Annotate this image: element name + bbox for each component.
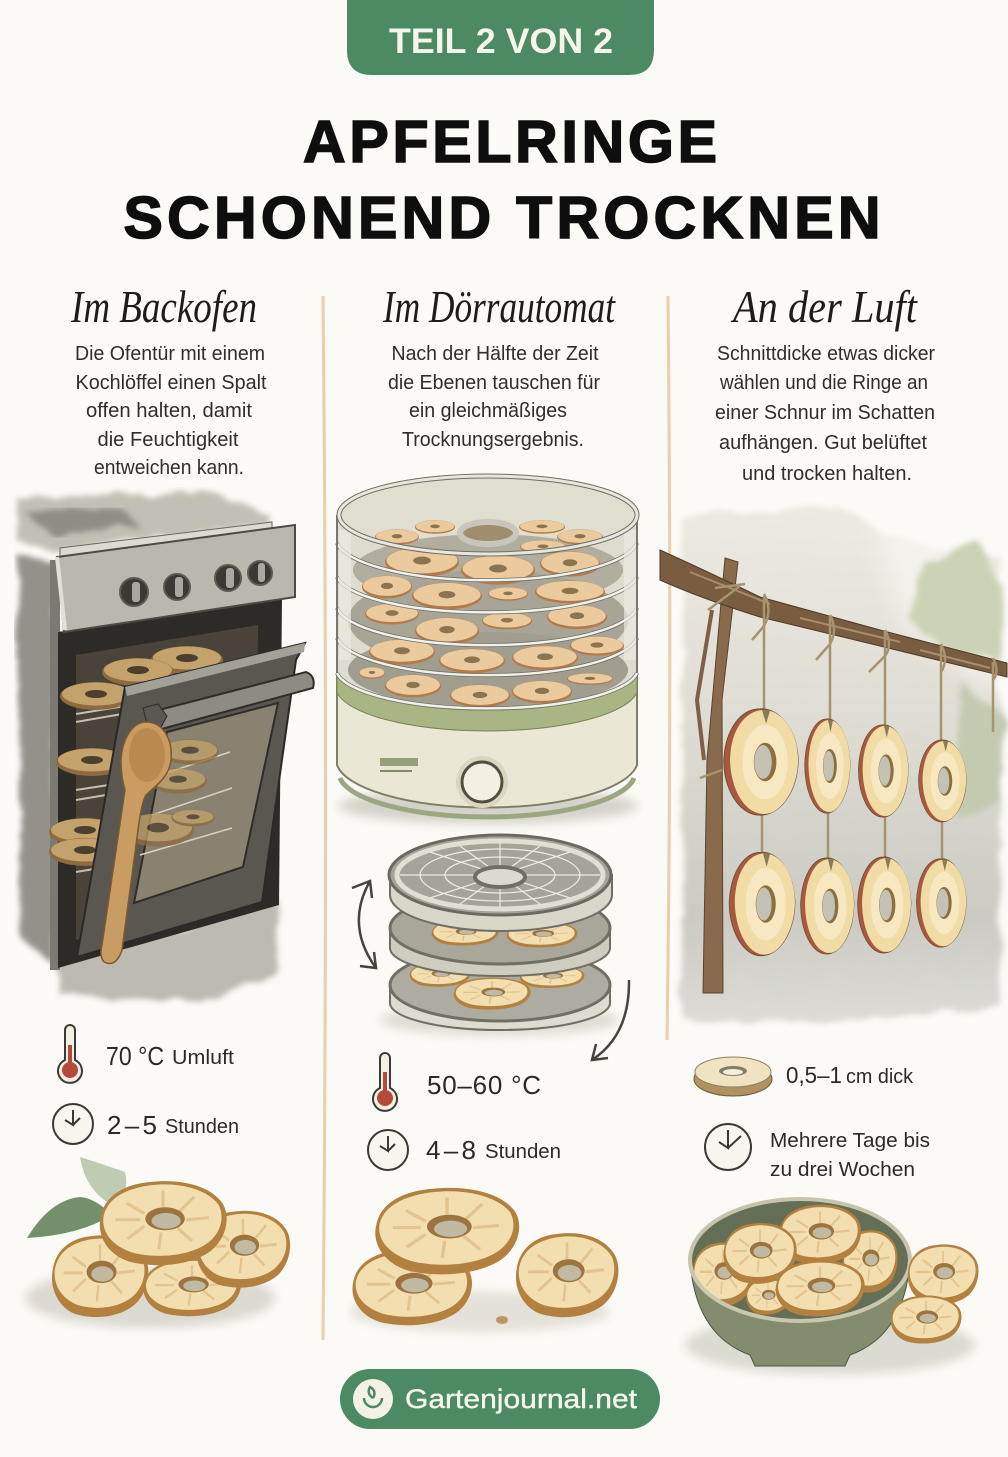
label: 4–8 Stunden — [426, 1135, 561, 1165]
text block: Backofen: die Feuchtigkeit — [98, 429, 239, 451]
label: Mehrere Tage bis zu drei Wochen: Mehrere Tage bis — [770, 1130, 930, 1152]
label: 2–5 Stunden — [107, 1110, 239, 1140]
panel: An der Luft — [660, 281, 1007, 1375]
label: 0,5–1 cm dick: cm dick — [846, 1066, 914, 1088]
label: 2–5 Stunden: Stunden — [165, 1116, 239, 1138]
footer badge: Gartenjournal.net — [340, 1369, 660, 1429]
illustration: food dehydrator — [337, 476, 638, 824]
label: 50–60 °C: 50–60 °C — [427, 1070, 541, 1100]
support post — [703, 558, 738, 993]
label: 70 °C Umluft: Umluft — [172, 1047, 234, 1069]
label: 70 °C Umluft — [106, 1041, 234, 1071]
text block: Dörrautomat: die Ebenen tauschen für — [388, 372, 600, 394]
lower tray — [390, 985, 610, 1030]
wooden spoon — [101, 722, 171, 964]
heading: An der Luft: An der Luft — [730, 281, 918, 332]
footer badge: Gartenjournal.net: Gartenjournal.net — [405, 1384, 638, 1414]
icon: thermometer — [58, 1025, 82, 1083]
text block: Dörrautomat: Nach der Hälfte der Zeit — [392, 343, 599, 365]
text block: Luft: wählen und die Ringe an — [719, 372, 928, 394]
illustration: swapped dryer trays with arrows — [352, 835, 629, 1060]
hanging rings — [724, 709, 798, 815]
glass trays — [337, 515, 637, 710]
panel: Im Backofen — [17, 281, 314, 1328]
icon: apple slice — [694, 1057, 772, 1096]
illustration: apple rings hanging from a branch — [660, 508, 1007, 1020]
illustration: oven with open door and wooden spoon — [17, 493, 314, 1002]
title: SCHONEND TROCKNEN — [124, 185, 880, 251]
label: 0,5–1 cm dick: 0,5–1 — [786, 1062, 842, 1088]
text block: Dörrautomat — [388, 343, 600, 451]
oven control panel — [57, 525, 295, 632]
bowl front — [690, 1260, 910, 1366]
arrow: curved down — [592, 980, 629, 1060]
heading: Im Backofen: Im Backofen — [70, 281, 257, 332]
text block: Dörrautomat: Trocknungsergebnis. — [402, 429, 584, 451]
dehydrator base — [337, 673, 637, 807]
text block: Backofen: Kochlöffel einen Spalt — [76, 372, 267, 394]
banner: Teil 2 von 2 — [347, 0, 654, 75]
text block: Luft: einer Schnur im Schatten — [715, 402, 935, 424]
icon: clock — [705, 1124, 751, 1170]
top tray — [390, 875, 612, 931]
banner: Teil 2 von 2: TEIL 2 VON 2 — [389, 22, 613, 61]
text block: Luft: aufhängen. Gut belüftet — [719, 432, 927, 454]
label: 2–5 Stunden: 2–5 — [107, 1110, 157, 1140]
arrow: rotate trays — [352, 881, 376, 968]
door handle — [155, 672, 314, 730]
label: Mehrere Tage bis zu drei Wochen: zu drei Wochen — [770, 1159, 915, 1181]
branch — [660, 550, 1007, 677]
label: 4–8 Stunden: 4–8 — [426, 1135, 476, 1165]
strings — [700, 584, 996, 862]
text block: Luft: Schnittdicke etwas dicker — [717, 343, 935, 365]
icon: clock — [368, 1130, 408, 1170]
illustration: dried apple rings with leaves — [25, 1157, 290, 1328]
icon: thermometer — [373, 1053, 397, 1111]
text block: Dörrautomat: ein gleichmäßiges — [409, 400, 567, 422]
text block: Backofen: Die Ofentür mit einem — [75, 343, 265, 365]
label: 0,5–1 cm dick — [786, 1062, 914, 1088]
title: APFELRINGE — [303, 109, 717, 175]
oven door — [77, 643, 305, 957]
panel: Im Dörrautomat — [337, 281, 638, 1332]
title — [124, 109, 880, 251]
heading: Im Dörrautomat: Im Dörrautomat — [382, 281, 616, 332]
icon: clock — [53, 1104, 93, 1144]
middle tray — [390, 928, 610, 976]
column dividers — [323, 296, 670, 1340]
illustration: dried apple rings — [350, 1188, 618, 1332]
text block: Backofen: entweichen kann. — [94, 457, 244, 479]
text block: Luft — [715, 343, 935, 485]
text block: Backofen — [75, 343, 267, 479]
text block: Luft: und trocken halten. — [742, 463, 912, 485]
text block: Backofen: offen halten, damit — [86, 400, 252, 422]
label: 4–8 Stunden: Stunden — [485, 1141, 561, 1163]
illustration: bowl of dried apple rings — [685, 1199, 978, 1375]
label: 70 °C Umluft: 70 °C — [106, 1041, 164, 1071]
label: Mehrere Tage bis zu drei Wochen — [770, 1130, 930, 1181]
